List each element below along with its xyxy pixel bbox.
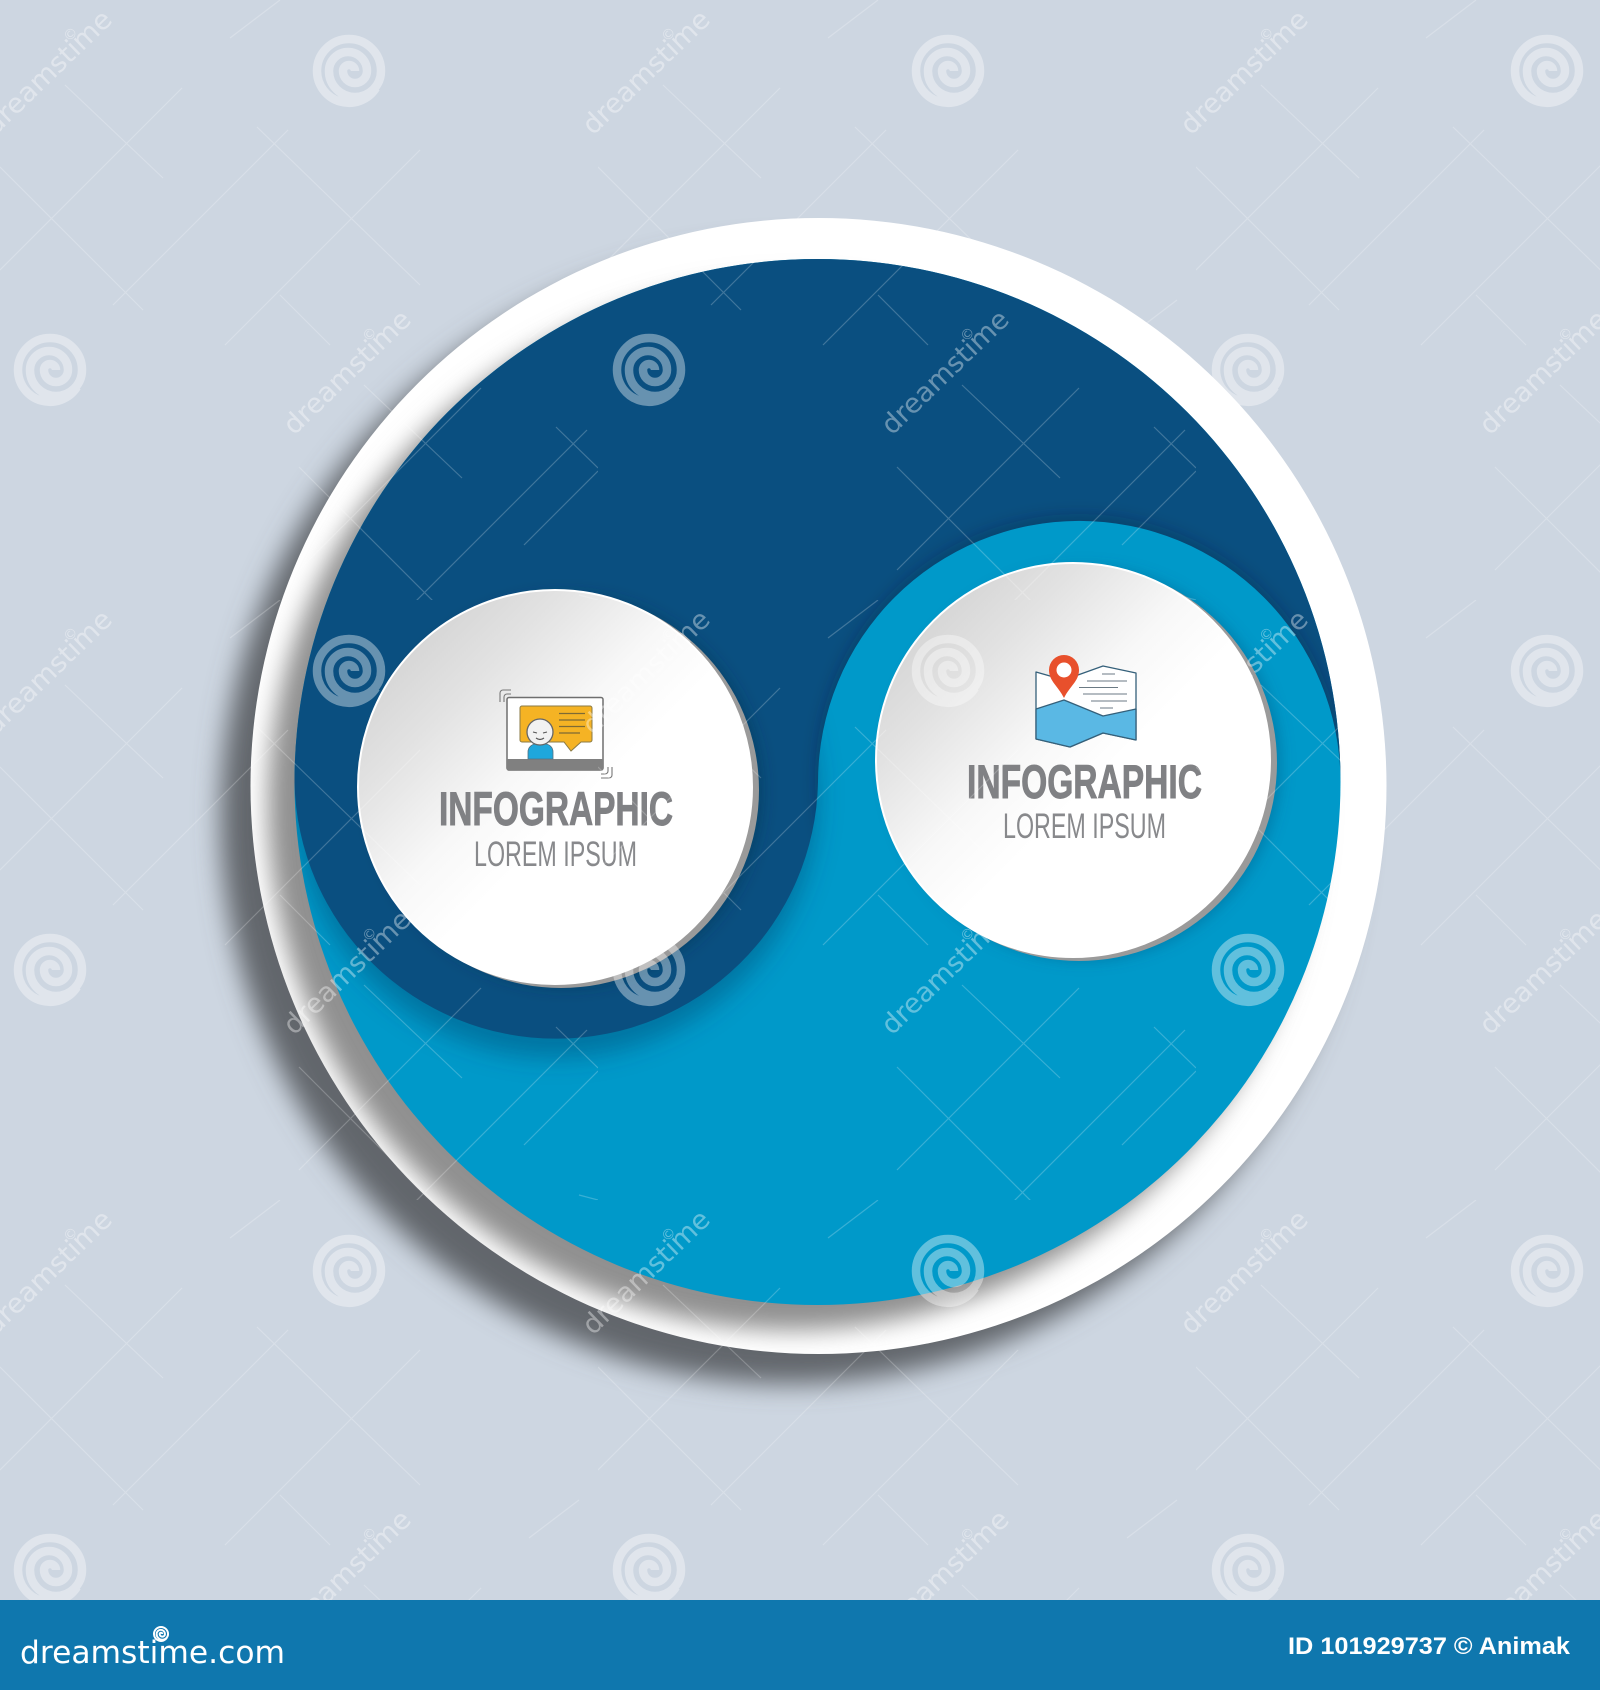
right circle plate (876, 563, 1270, 957)
shadow of light lobe on dark region (814, 513, 1340, 809)
main circle graphic (250, 218, 1386, 1354)
soft shadow of right circle (887, 567, 1281, 961)
watermark wordmarks: © (60, 1224, 82, 1245)
footer bar (0, 1600, 1600, 1690)
light blue base circle (294, 259, 1340, 1305)
left circle plate (358, 590, 752, 984)
watermark wordmarks: dreamstime (576, 1204, 717, 1341)
watermark wordmarks: dreamstime (277, 304, 418, 441)
subheading: left: LOREM IPSUM (474, 835, 637, 874)
watermark wordmarks: © (1555, 1524, 1577, 1545)
watermark wordmarks: © (658, 624, 680, 645)
gray shadow band on ring (268, 282, 1316, 1330)
watermark wordmarks: © (1555, 924, 1577, 945)
watermark wordmarks: dreamstime (277, 1504, 418, 1641)
panel: left white circle (358, 590, 763, 988)
watermark wordmarks: © (957, 1524, 979, 1545)
watermark wordmarks: dreamstime (1174, 1204, 1315, 1341)
watermark wordmarks: © (658, 1224, 680, 1245)
heading: right: INFOGRAPHIC (967, 755, 1202, 808)
watermark wordmarks: © (957, 324, 979, 345)
watermark wordmarks: © (1256, 1224, 1278, 1245)
icon: footer spiral (154, 1627, 168, 1641)
watermark wordmarks: © (60, 624, 82, 645)
heading: left: INFOGRAPHIC (439, 782, 673, 835)
soft shadow of left circle (369, 594, 763, 988)
left circle gray edge (363, 592, 759, 988)
watermark wordmarks: dreamstime (875, 304, 1016, 441)
watermark wordmarks: © (359, 1524, 381, 1545)
watermark wordmarks: © (359, 324, 381, 345)
watermark wordmarks: © (1555, 324, 1577, 345)
watermark wordmarks: © (1256, 24, 1278, 45)
panel: right white circle (876, 563, 1281, 961)
dark blue yin-yang region (294, 259, 1340, 1039)
watermark wordmarks: dreamstime (576, 604, 717, 741)
subheading: right: LOREM IPSUM (1003, 807, 1166, 846)
watermark wordmarks: dreamstime (1174, 4, 1315, 141)
watermark wordmarks: © (359, 924, 381, 945)
watermark wordmarks: dreamstime (576, 4, 717, 141)
watermark wordmarks: dreamstime (875, 1504, 1016, 1641)
white outer ring (250, 218, 1386, 1354)
right circle gray edge (881, 565, 1277, 961)
footer credit: ID 101929737 © Animak (1288, 1633, 1571, 1660)
icon: presenter with speech bubble (500, 690, 612, 778)
watermark wordmarks: © (658, 24, 680, 45)
watermark wordmarks: dreamstime (277, 904, 418, 1041)
watermark wordmarks: dreamstime (1174, 604, 1315, 741)
watermark wordmarks: dreamstime (875, 904, 1016, 1041)
soft shadow of dark lobe (294, 742, 827, 1067)
watermark wordmarks: © (957, 924, 979, 945)
footer logo: dreamstime.com (20, 1635, 285, 1671)
disc cast shadow on background (220, 248, 1356, 1384)
watermark wordmarks: © (60, 24, 82, 45)
watermark wordmarks: © (1256, 624, 1278, 645)
icon: map with location pin (1036, 655, 1136, 747)
